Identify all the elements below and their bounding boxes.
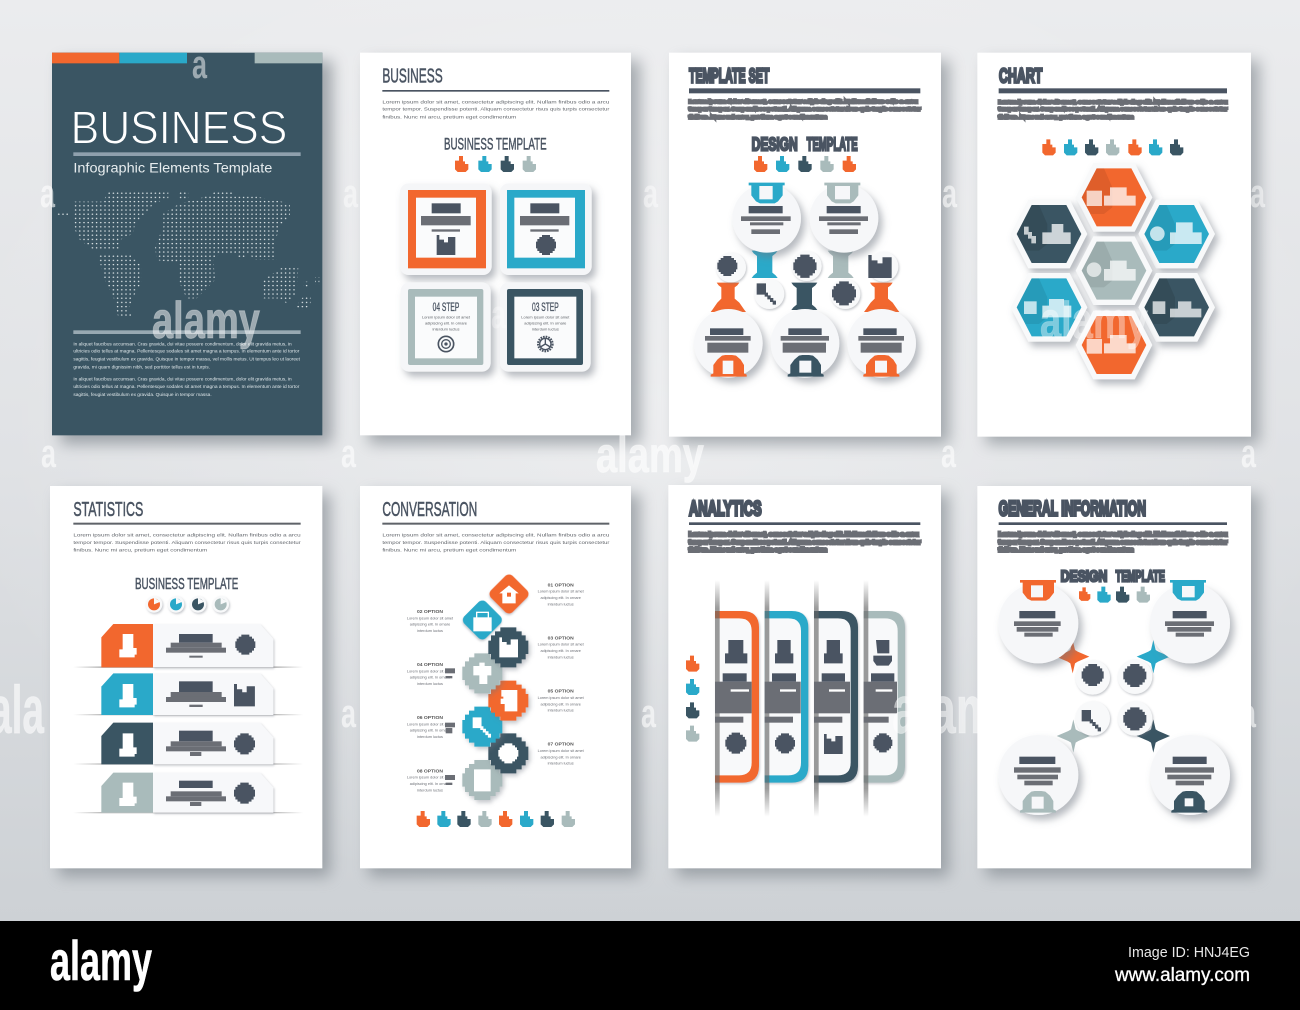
title rule <box>73 152 301 156</box>
alamy watermarks: a <box>941 432 957 476</box>
intro text <box>689 532 920 554</box>
node: orange circle left <box>694 309 763 378</box>
panel: general information <box>977 486 1259 877</box>
node: bottom-right circle <box>1150 735 1230 815</box>
step 03 dark <box>488 627 528 667</box>
option labels: interdum luctus <box>548 708 574 712</box>
intro text: tempor tempor. Suspendisse potenti. Aliquam consectetur risus quis turpis consectetur <box>689 540 920 546</box>
option labels: 03 OPTION <box>548 635 574 641</box>
card: 04 step: Lorem ipsum dolor sit amet <box>422 314 471 319</box>
intro text: finibus. Nunc mi arcu, pretium eget condimentum <box>382 548 516 554</box>
alamy watermarks: alamy <box>892 672 1022 748</box>
card: 04 step <box>401 282 491 372</box>
node: blue circle <box>732 183 801 253</box>
node: dark circle <box>771 309 839 378</box>
intro text <box>999 532 1227 554</box>
alamy watermarks: a <box>1250 172 1266 216</box>
card: 03 step: adipiscing elit. In ornare <box>524 320 567 325</box>
intro text: finibus. Nunc mi arcu, pretium eget condimentum <box>382 114 516 120</box>
intro text: Lorem ipsum dolor sit amet, consectetur adipiscing elit. Nullam finibus odio a arcu <box>382 99 610 105</box>
option labels <box>407 582 585 792</box>
intro text: Lorem ipsum dolor sit amet, consectetur adipiscing elit. Nullam finibus odio a arcu <box>73 533 301 539</box>
heading: CONVERSATION <box>382 498 477 521</box>
row: dark <box>73 723 303 765</box>
node: orange circle right <box>847 309 916 378</box>
intro text: Lorem ipsum dolor sit amet, consectetur adipiscing elit. Nullam finibus odio a arcu <box>689 99 918 105</box>
cover subtitle: Infographic Elements Template <box>73 160 273 176</box>
mini icons <box>417 811 575 827</box>
option labels: interdum luctus <box>417 788 443 792</box>
option labels: interdum luctus <box>417 682 443 686</box>
mini icons <box>1079 587 1150 603</box>
panel: statistics <box>50 486 330 877</box>
alamy watermarks: a <box>641 692 657 736</box>
heading: GENERAL INFORMATION <box>999 497 1146 521</box>
intro text: Lorem ipsum dolor sit amet, consectetur adipiscing elit. Nullam finibus odio a arcu <box>999 99 1227 105</box>
option labels: interdum luctus <box>417 629 443 633</box>
card: 04 step: adipiscing elit. In ornare <box>425 320 468 325</box>
node: top-left circle <box>998 580 1078 663</box>
alamy watermarks: a <box>942 172 958 216</box>
alamy watermarks: alamy <box>596 427 704 483</box>
node: bottom-left circle <box>998 735 1078 815</box>
cover body text: In aliquet faucibus accumsan. Cras gravida, dui vitae posuere condimentum, dolor elit gravida metus, in <box>73 342 292 348</box>
heading rule <box>73 523 301 525</box>
cover body text: ultricies odio tellus at magna. Pellentesque sodales sit amet magna a tempus. In elementum ante id tortor <box>73 384 300 390</box>
heading: CHART <box>999 65 1042 87</box>
node: top-right circle <box>1150 580 1230 663</box>
dotted world map <box>57 190 319 317</box>
step 01 orange <box>487 572 531 616</box>
pie icons <box>146 596 229 613</box>
heading rule <box>689 522 920 525</box>
heading rule <box>689 88 920 93</box>
intro text: tempor tempor. Suspendisse potenti. Aliquam consectetur risus quis turpis consectetur <box>689 107 921 113</box>
hexagon: orange bottom <box>1076 311 1152 379</box>
panel: analytics <box>668 485 949 877</box>
intro text: Lorem ipsum dolor sit amet, consectetur adipiscing elit. Nullam finibus odio a arcu <box>689 532 918 538</box>
colour bars <box>52 53 322 63</box>
subheading: DESIGN <box>1061 568 1107 585</box>
step 07 dark <box>488 733 528 773</box>
option labels: adipiscing elit. In ornare <box>540 596 581 600</box>
node: grey circle <box>810 183 878 253</box>
card: blue step <box>500 183 592 275</box>
alamy watermarks: a <box>1241 432 1257 476</box>
panel: conversation <box>360 486 640 877</box>
subheading <box>1061 568 1165 585</box>
option labels: Lorem ipsum dolor sit amet <box>538 590 585 594</box>
option labels: adipiscing elit. In ornare <box>540 649 581 653</box>
option labels: Lorem ipsum dolor sit amet <box>538 749 585 753</box>
intro text: finibus. Nunc mi arcu, pretium eget condimentum <box>999 548 1134 554</box>
option labels: 07 OPTION <box>548 742 574 748</box>
alamy watermarks: a <box>341 692 357 736</box>
alamy watermarks <box>0 43 1266 748</box>
hexagon: orange top <box>1076 163 1152 232</box>
heading: ANALYTICS <box>689 497 762 521</box>
mini icons <box>455 156 536 172</box>
step 05 orange <box>488 681 528 721</box>
alamy watermarks: a <box>1241 692 1257 736</box>
intro text: finibus. Nunc mi arcu, pretium eget condimentum <box>689 115 827 121</box>
tab: blue <box>765 580 808 817</box>
panel: business steps <box>360 53 640 444</box>
intro text: Lorem ipsum dolor sit amet, consectetur adipiscing elit. Nullam finibus odio a arcu <box>382 533 610 539</box>
option labels: Lorem ipsum dolor sit amet <box>407 722 454 726</box>
intro text <box>382 99 610 120</box>
option labels: Lorem ipsum dolor sit amet <box>407 669 454 673</box>
lower rule <box>73 330 301 334</box>
intro text <box>73 533 301 554</box>
cover body text: ultricies odio tellus at magna. Pellentesque sodales sit amet magna a tempus. In elementum ante id tortor <box>73 349 300 355</box>
card: 03 step: interdum luctus <box>532 327 559 332</box>
heading rule <box>382 90 609 92</box>
step 04 grey <box>462 653 502 693</box>
subheading: TEMPLATE <box>1116 568 1165 585</box>
heading rule <box>382 523 609 525</box>
alamy watermarks: a <box>343 172 359 216</box>
panel: template set <box>669 53 949 444</box>
row: grey <box>73 773 303 813</box>
card: 03 step <box>500 282 591 372</box>
image id: Image ID: HNJ4EG <box>1128 944 1250 961</box>
small icon circles <box>716 251 898 309</box>
intro text <box>382 533 610 554</box>
heading rule <box>999 88 1227 93</box>
step 08 grey <box>462 760 502 800</box>
tab: grey <box>864 580 905 817</box>
alamy watermarks: a <box>341 432 357 476</box>
card: 04 step: 04 STEP <box>433 300 459 314</box>
intro text <box>689 99 921 121</box>
alamy watermarks: a <box>192 43 208 87</box>
panel: chart hexagons <box>977 53 1259 444</box>
option labels: Lorem ipsum dolor sit amet <box>407 616 454 620</box>
subheading: BUSINESS TEMPLATE <box>135 576 238 593</box>
row: orange <box>73 624 303 668</box>
option labels: Lorem ipsum dolor sit amet <box>407 776 454 780</box>
heading: BUSINESS <box>382 65 443 88</box>
intro text: finibus. Nunc mi arcu, pretium eget condimentum <box>999 115 1133 121</box>
tab: orange <box>715 580 759 817</box>
subheading <box>752 133 858 154</box>
option labels: adipiscing elit. In ornare <box>410 676 450 680</box>
option labels: Lorem ipsum dolor sit amet <box>538 643 585 647</box>
option labels: Lorem ipsum dolor sit amet <box>538 696 585 700</box>
cover body text: sagittis, feugiat vestibulum ex gravida. Quisque in tempor massa. <box>73 392 212 398</box>
cover body text: gravida, mi quam dignissim nibh, sed porttitor tellus est in turpis. <box>73 364 210 370</box>
connectors <box>711 251 899 312</box>
cover body text <box>73 342 301 398</box>
tab: dark <box>814 580 858 817</box>
card: 03 step: Lorem ipsum dolor sit amet <box>521 314 570 319</box>
hexagon: dark right <box>1138 273 1215 342</box>
small icon circles <box>1075 659 1152 736</box>
option labels: 06 OPTION <box>417 715 443 721</box>
subheading: TEMPLATE <box>807 133 858 154</box>
intro text: tempor tempor. Suspendisse potenti. Aliquam consectetur risus quis turpis consectetur <box>382 540 610 546</box>
footer band <box>0 921 1300 1010</box>
option labels: adipiscing elit. In ornare <box>540 755 581 759</box>
subheading: BUSINESS TEMPLATE <box>444 134 547 153</box>
mini icons <box>1042 139 1183 155</box>
stars <box>1056 640 1170 753</box>
option markers <box>445 668 455 785</box>
footer logo: alamy <box>50 929 152 992</box>
cover title: BUSINESS <box>71 101 287 153</box>
hexagon: grey centre <box>1076 236 1152 305</box>
card: orange step <box>400 183 492 275</box>
heading: TEMPLATE SET <box>689 65 769 87</box>
option labels: 01 OPTION <box>548 582 574 588</box>
alamy watermarks: a <box>491 293 507 337</box>
alamy watermarks: a <box>41 432 57 476</box>
option labels: 05 OPTION <box>548 688 574 694</box>
option labels: interdum luctus <box>548 762 574 766</box>
intro text: tempor tempor. Suspendisse potenti. Aliquam consectetur risus quis turpis consectetur <box>999 540 1227 546</box>
row: blue <box>73 673 303 715</box>
option labels: interdum luctus <box>417 735 443 739</box>
option labels: interdum luctus <box>548 602 574 606</box>
intro text: tempor tempor. Suspendisse potenti. Aliquam consectetur risus quis turpis consectetur <box>73 540 301 546</box>
option labels: adipiscing elit. In ornare <box>410 729 450 733</box>
option labels: adipiscing elit. In ornare <box>410 782 450 786</box>
intro text: tempor tempor. Suspendisse potenti. Aliquam consectetur risus quis turpis consectetur <box>999 107 1227 113</box>
intro text: finibus. Nunc mi arcu, pretium eget condimentum <box>73 548 207 554</box>
option labels: interdum luctus <box>548 655 574 659</box>
heading rule <box>999 522 1227 525</box>
alamy watermarks: alamy <box>1040 292 1148 350</box>
hexagon: blue right <box>1138 200 1215 268</box>
hexagon: dark left <box>1011 200 1087 268</box>
hexagon: blue left <box>1011 273 1087 342</box>
step 02 blue <box>461 598 504 642</box>
cover body text: In aliquet faucibus accumsan. Cras gravida, dui vitae posuere condimentum, dolor elit gravida metus, in <box>73 376 292 382</box>
panel: business cover <box>52 53 332 444</box>
alamy watermarks: alamy <box>152 292 260 350</box>
option labels: adipiscing elit. In ornare <box>540 702 581 706</box>
mini icons <box>754 156 856 172</box>
intro text: Lorem ipsum dolor sit amet, consectetur adipiscing elit. Nullam finibus odio a arcu <box>999 532 1227 538</box>
side icons <box>686 656 699 742</box>
website: www.alamy.com <box>1114 965 1250 986</box>
option labels: adipiscing elit. In ornare <box>410 623 450 627</box>
subheading: DESIGN <box>752 133 798 154</box>
card: 04 step: interdum luctus <box>432 327 460 332</box>
icon: target <box>438 336 454 352</box>
alamy watermarks: a <box>40 172 56 216</box>
intro text <box>999 99 1227 121</box>
cover body text: sagittis, feugiat vestibulum ex gravida. Quisque in tempor massa, vel mollis metus. Ut tempus leo ut laoreet <box>73 357 301 363</box>
icon: gear <box>538 337 553 351</box>
option labels: 04 OPTION <box>417 662 443 668</box>
option labels: 08 OPTION <box>417 768 443 774</box>
heading: STATISTICS <box>73 498 143 521</box>
alamy watermarks: a <box>643 172 659 216</box>
intro text: finibus. Nunc mi arcu, pretium eget condimentum <box>689 548 827 554</box>
option labels: 02 OPTION <box>417 609 443 615</box>
intro text: tempor tempor. Suspendisse potenti. Aliquam consectetur risus quis turpis consectetur <box>382 107 610 113</box>
card: 03 step: 03 STEP <box>532 300 559 314</box>
step 06 blue <box>462 707 502 747</box>
